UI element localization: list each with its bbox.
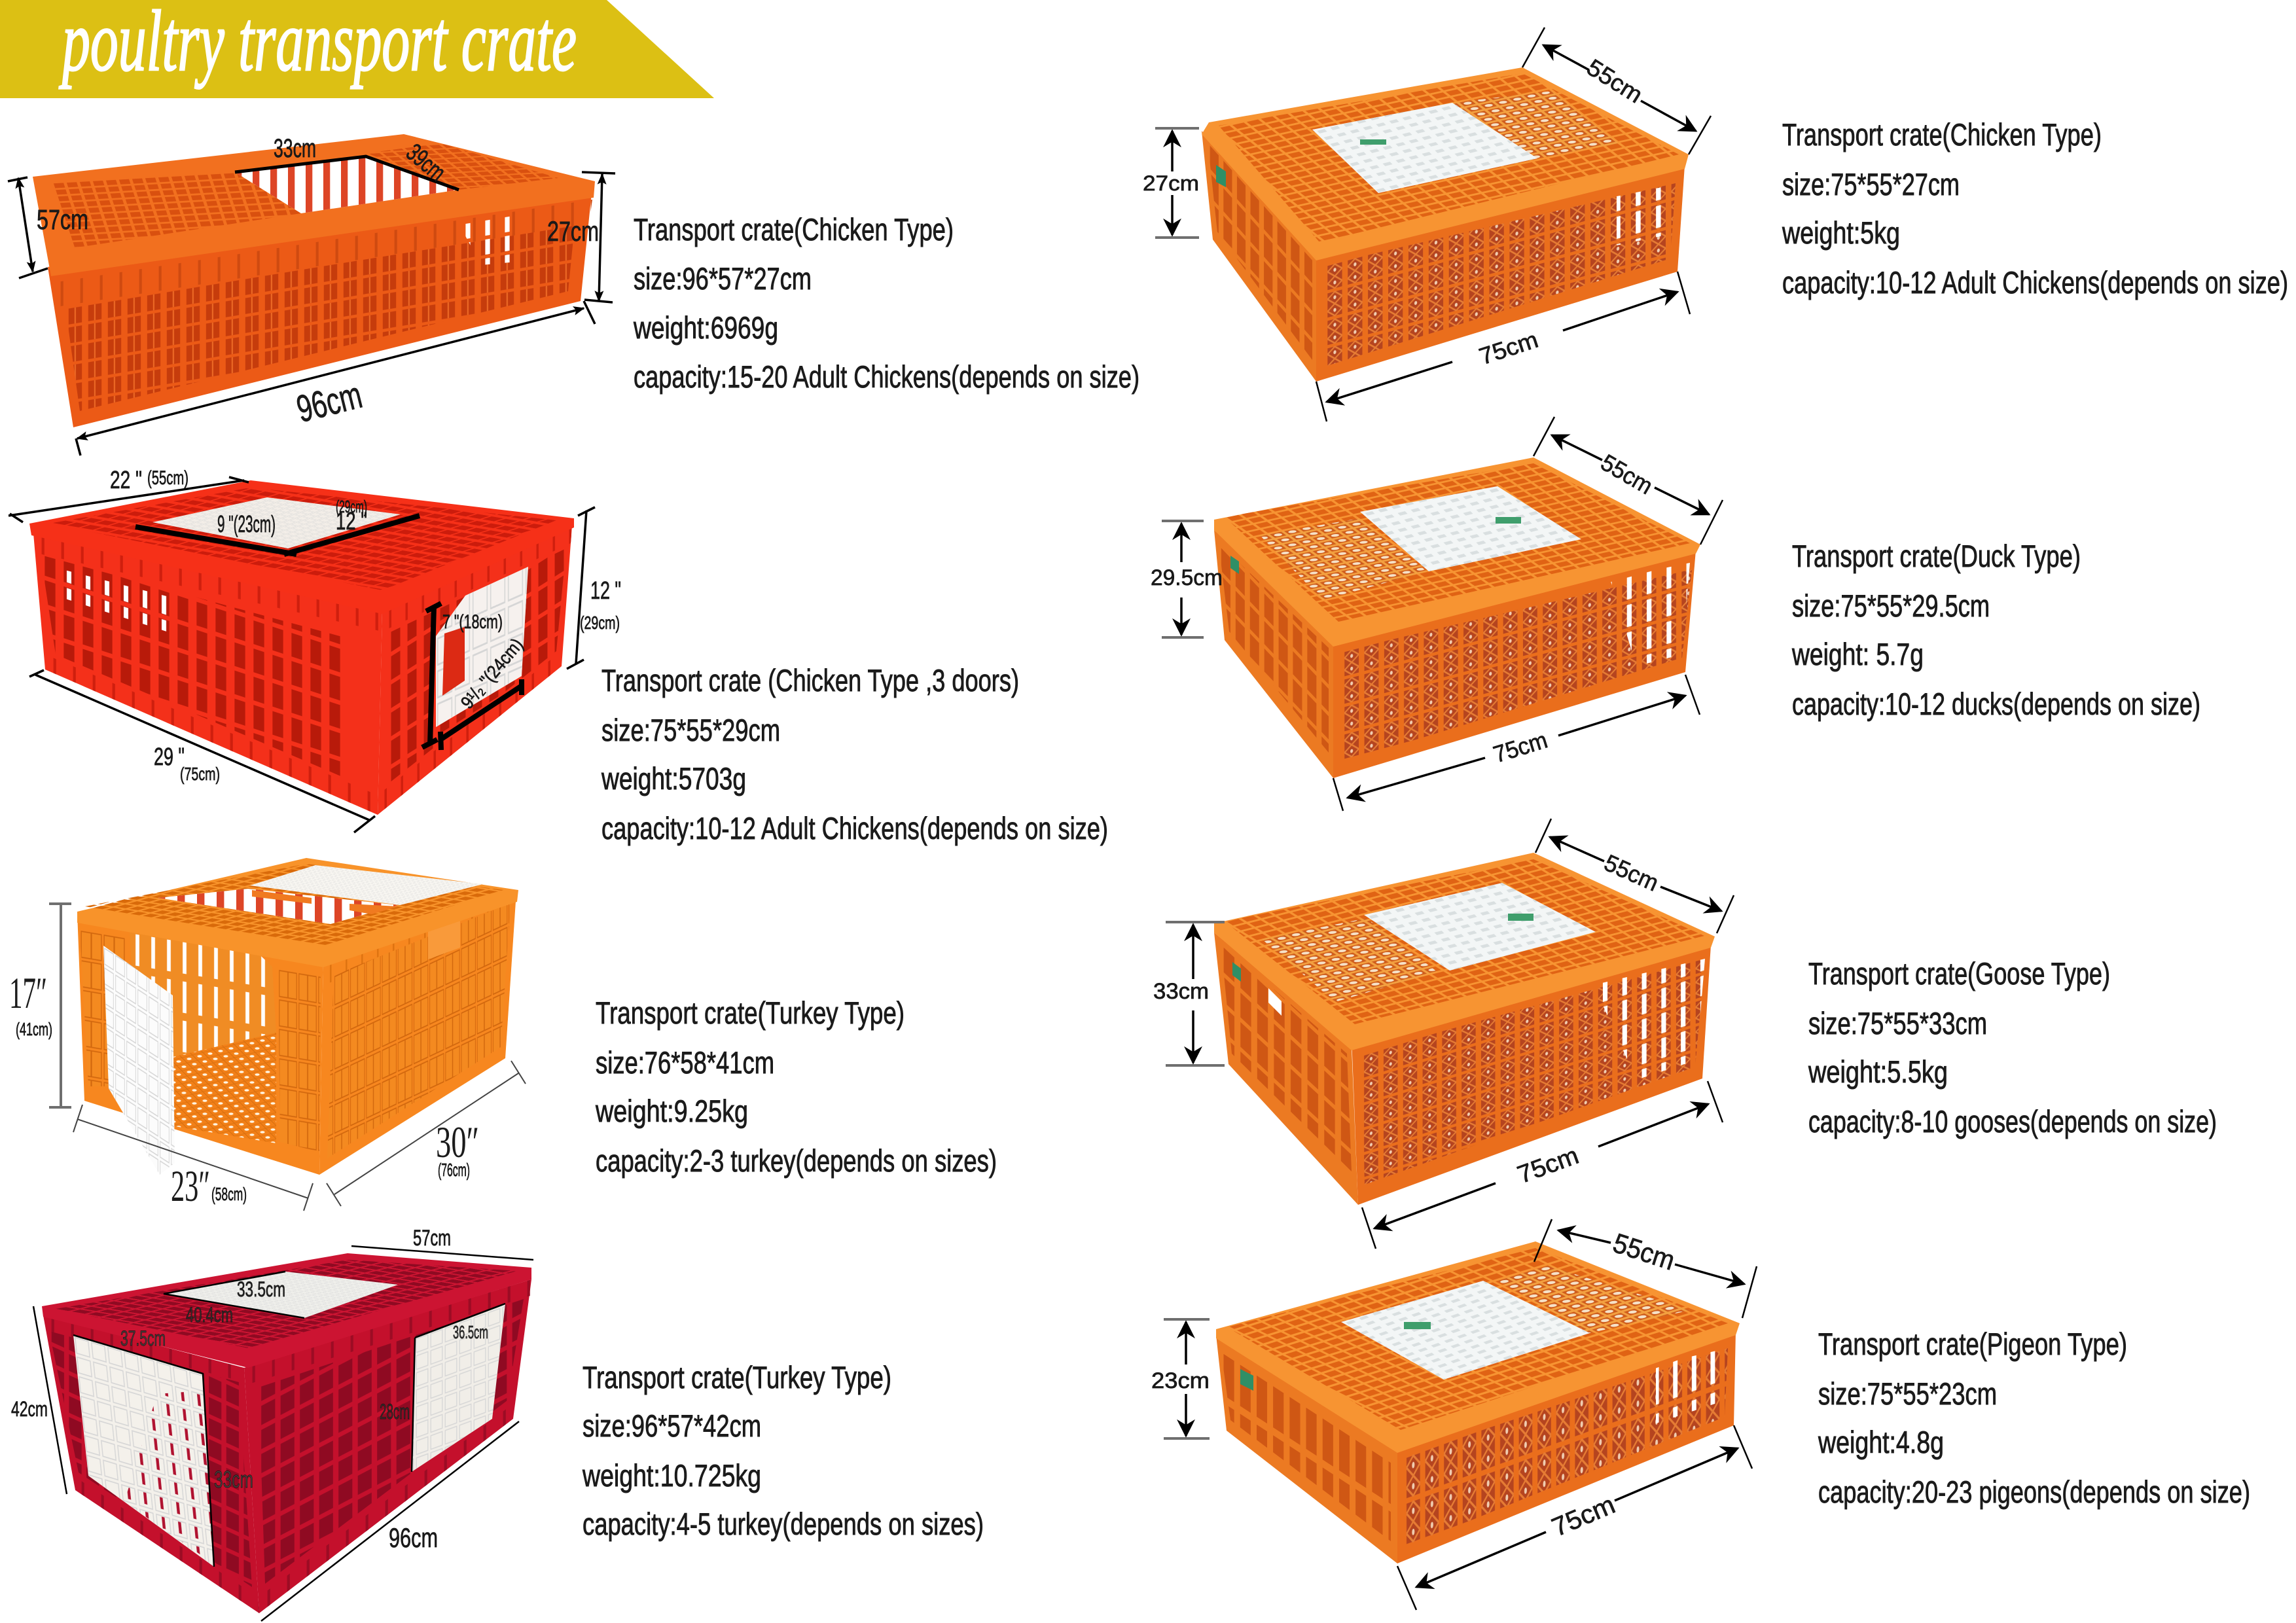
dimension labels crate 4 outer: 57cm [413,1226,451,1251]
dimension 17 inch (41cm) [9,904,71,1107]
panel: crate 7 goose type [1153,819,1734,1249]
dimension 17 inch (41cm): 17″ [9,968,47,1018]
panel: crate 6 duck type [1151,417,1723,811]
dimension labels crate 4 openings: 33cm [214,1466,253,1493]
dimension 23 inch (58cm) [73,1105,313,1211]
dimension 96cm: 96cm [293,374,366,431]
dimension length 29 inch (75cm) [29,670,375,832]
panel: crate 5 chicken type 27cm [1143,27,1711,421]
dimension 55cm: 55cm [1609,1227,1679,1276]
dimension 23 inch (58cm): 23″ [171,1161,210,1211]
dimension door 7 inch and 9.5 inch [422,603,527,750]
dimension labels crate 4 openings [73,1272,505,1567]
text block: crate 6 specs: weight: 5.7g [1791,637,1924,671]
dimension 75cm [1397,1425,1752,1610]
text block: crate 3 specs: size:76*58*41cm [596,1045,774,1080]
text block: crate 1 specs: Transport crate(Chicken Type) [634,212,954,247]
dimension 27cm: 27cm [1143,171,1199,195]
text block: crate 4 specs [582,1360,984,1541]
text block: crate 3 specs: weight:9.25kg [595,1094,748,1128]
text block: crate 5 specs [1782,117,2288,300]
dimension 55cm: 55cm [1582,54,1647,108]
dimension door 7 inch and 9.5 inch: 7 "(18cm) [442,611,503,633]
dimension 57cm: 57cm [37,204,88,236]
text block: crate 8 specs: size:75*55*23cm [1818,1376,1997,1411]
dimension labels crate 4 openings: 36.5cm [453,1322,488,1342]
text block: crate 4 specs: Transport crate(Turkey Type) [583,1360,891,1395]
dimension 55cm [1522,27,1711,154]
dimension labels crate 4 openings: 28cm [380,1400,410,1423]
dimension labels crate 4 outer [11,1226,533,1621]
dimension 29.5cm: 29.5cm [1151,565,1223,590]
dimension 27cm: 27cm [547,216,599,247]
text block: crate 5 specs: weight:5kg [1782,215,1900,250]
dimension labels crate 4 openings: 37.5cm [120,1327,166,1350]
dimension door 7 inch and 9.5 inch: 9¹/₂ "(24cm) [457,634,527,713]
text block: crate 7 specs: Transport crate(Goose Type) [1808,956,2110,991]
text block: crate 1 specs: capacity:15-20 Adult Chickens(depends on size) [634,359,1139,394]
text block: crate 1 specs: size:96*57*27cm [634,261,812,296]
dimension 75cm: 75cm [1490,726,1551,768]
dimension length 29 inch (75cm): (75cm) [180,764,220,784]
text block: crate 4 specs: size:96*57*42cm [583,1408,761,1443]
text block: crate 2 specs: Transport crate (Chicken Type ,3 doors) [601,663,1019,698]
title banner [0,0,714,98]
dimension 22 inch (55cm): (55cm) [147,467,188,489]
crate 6 illustration [1214,457,1700,778]
dimension 33cm: 33cm [1153,979,1209,1004]
dimension height 12 inch (29cm): (29cm) [580,613,620,633]
dimension 27cm [547,172,615,302]
text block: crate 1 specs [633,212,1139,394]
dimension lid opening 9 and 12 inch: (29cm) [336,497,367,516]
text block: crate 8 specs [1818,1327,2250,1509]
dimension 27cm [1143,128,1199,238]
text block: crate 2 specs: size:75*55*29cm [601,713,780,747]
dimension 33cm: 33cm [274,134,316,163]
dimension 29.5cm [1151,521,1223,637]
dimension 30 inch (76cm): 30″ [436,1117,479,1167]
dimension 55cm [1534,1219,1757,1318]
text block: crate 2 specs: weight:5703g [601,761,746,796]
dimension lid opening 9 and 12 inch: 9 "(23cm) [217,510,276,537]
dimension 30 inch (76cm): (76cm) [438,1160,470,1180]
text block: crate 4 specs: weight:10.725kg [582,1458,761,1493]
text block: crate 3 specs [595,995,997,1178]
dimension 55cm: 55cm [1600,849,1662,897]
text block: crate 7 specs: weight:5.5kg [1808,1054,1948,1089]
dimension lid opening 9 and 12 inch: 12 " [336,508,367,535]
text block: crate 3 specs: capacity:2-3 turkey(depends on sizes) [596,1143,997,1178]
dimension 22 inch (55cm): 22 " [110,467,142,494]
dimension 33cm: 39cm [401,139,450,187]
text block: crate 8 specs: Transport crate(Pigeon Type) [1818,1327,2127,1361]
dimension height 12 inch (29cm): 12 " [590,577,621,605]
dimension labels crate 4 outer: 42cm [11,1397,48,1421]
dimension 23cm: 23cm [1151,1368,1210,1393]
text block: crate 6 specs: size:75*55*29.5cm [1792,588,1990,623]
dimension 75cm: 75cm [1514,1142,1583,1189]
dimension 55cm [1534,417,1723,544]
text block: crate 8 specs: weight:4.8g [1818,1425,1944,1459]
text block: crate 5 specs: Transport crate(Chicken Type) [1782,117,2102,152]
dimension 23cm [1151,1319,1210,1438]
dimension labels crate 4 openings: 33.5cm [237,1277,285,1301]
panel: crate 1 chicken type 96cm [8,134,615,455]
text block: crate 1 specs: weight:6969g [633,310,778,345]
crate 3 illustration [77,858,518,1175]
crate 4 illustration [42,1253,531,1613]
text block: crate 4 specs: capacity:4-5 turkey(depends on sizes) [583,1507,984,1541]
text block: crate 7 specs: size:75*55*33cm [1808,1006,1987,1041]
dimension labels crate 4 openings: 40.4cm [186,1303,233,1327]
text block: crate 2 specs: capacity:10-12 Adult Chickens(depends on size) [601,811,1108,846]
dimension labels crate 4 outer: 96cm [389,1522,438,1553]
dimension 75cm [1316,272,1690,421]
dimension lid opening 9 and 12 inch [135,497,420,554]
dimension 75cm [1362,1081,1723,1249]
crate 2 illustration [29,480,574,815]
dimension 55cm [1535,819,1734,933]
dimension 23 inch (58cm): (58cm) [211,1184,247,1204]
dimension 96cm [76,301,595,455]
text block: crate 6 specs: Transport crate(Duck Type) [1792,539,2081,573]
dimension 75cm: 75cm [1548,1490,1619,1543]
dimension length 29 inch (75cm): 29 " [154,743,185,771]
dimension 75cm [1333,675,1700,811]
crate 8 illustration [1216,1241,1740,1563]
crate 7 illustration [1214,853,1715,1205]
dimension 55cm: 55cm [1596,449,1657,499]
crate 1 illustration [33,134,595,427]
dimension 75cm: 75cm [1476,326,1541,370]
panel: crate 4 turkey type 96cm [11,1226,533,1621]
crate 5 illustration [1202,67,1689,382]
dimension height 12 inch (29cm) [567,507,621,669]
dimension 22 inch (55cm) [9,467,249,522]
text block: crate 6 specs [1791,539,2200,721]
dimension 57cm [8,177,88,278]
text block: crate 5 specs: size:75*55*27cm [1782,167,1960,202]
panel: crate 3 turkey type 76cm [9,858,526,1211]
text block: crate 3 specs: Transport crate(Turkey Type) [596,995,905,1030]
dimension 33cm [1153,922,1225,1065]
text block: crate 2 specs [601,663,1108,846]
panel: crate 2 chicken type 3 doors [9,467,621,832]
dimension 17 inch (41cm): (41cm) [16,1019,52,1039]
dimension 33cm [235,134,459,190]
dimension 30 inch (76cm) [327,1061,526,1206]
text block: crate 7 specs [1808,956,2217,1139]
panel: crate 8 pigeon type [1151,1219,1757,1610]
